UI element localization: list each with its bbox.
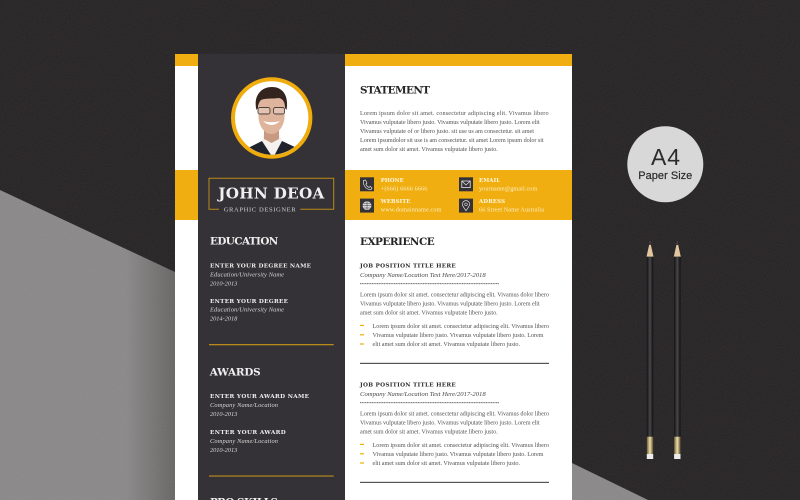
resume page — [175, 54, 572, 500]
job summary 2: Vivamus vulputate libero justo. Vivamus vulputate libero justo. Lorem elit — [360, 419, 540, 426]
job summary 1: Vivamus vulputate libero justo. Vivamus vulputate libero justo. Lorem elit — [360, 300, 540, 307]
page sheet — [175, 54, 572, 500]
award company 2: Company Name/Location — [210, 438, 278, 445]
education heading: EDUCATION — [210, 236, 279, 248]
yellow contact band left — [175, 170, 198, 220]
address details: 66 Street Name Australia — [479, 206, 544, 213]
phone details: +(666) 6666 6666 — [381, 185, 427, 192]
job bullets 2: Lorem ipsum dolor sit amet. consectetur adipiscing elit. Vivamus libero — [372, 442, 549, 449]
job bullets 1 — [360, 323, 549, 348]
company line 2: Company Name/Location Text Here/2017-2018 — [360, 391, 486, 398]
job bullets 1: Lorem ipsum dolor sit amet. consectetur adipiscing elit. Vivamus libero — [372, 323, 549, 330]
job summary 2 — [360, 410, 549, 435]
phone details: PHONE — [381, 178, 404, 184]
icon: pencil right — [674, 241, 681, 459]
email details: yourname@gmail.com — [479, 185, 537, 192]
yellow top band right — [345, 54, 572, 66]
statement section — [360, 84, 549, 153]
university 2: Education/University Name — [209, 307, 284, 314]
address details: ADRESS — [478, 199, 505, 205]
email details: EMAIL — [479, 178, 500, 184]
phone details — [381, 178, 427, 192]
company line 1: Company Name/Location Text Here/2017-2018 — [360, 272, 486, 279]
background: grey diagonal panel — [0, 190, 175, 500]
statement paragraph — [360, 110, 549, 153]
badge A4: A4 — [651, 144, 680, 170]
university 1: Education/University Name — [209, 271, 284, 278]
background: grey diagonal panel right of page — [572, 463, 648, 500]
address details — [478, 199, 544, 213]
statement paragraph: amet sum dolor sit amet. Vivamus vulputate libero justo. — [360, 146, 498, 153]
job entry 1 — [359, 264, 549, 348]
badge caption: Paper Size — [638, 170, 692, 182]
job bullets 2: Vivamus vulputate libero justo. Vivamus vulputate libero justo. Lorem — [372, 451, 544, 458]
experience section — [359, 236, 549, 483]
job title 2: JOB POSITION TITLE HERE — [359, 382, 456, 388]
job summary 2: Lorem ipsum dolor sit amet. consectetur adipiscing elit. Vivamus dolor libero — [360, 410, 549, 417]
awards heading: AWARDS — [209, 366, 261, 378]
education section — [209, 236, 312, 323]
profile photo — [233, 79, 310, 160]
degree 2: ENTER YOUR DEGREE — [210, 299, 289, 305]
job summary 2: amet sum dolor sit amet. Vivamus vulputate libero justo. — [360, 428, 498, 435]
name: JOHN DEOA — [216, 184, 325, 202]
portrait — [250, 87, 294, 155]
icon: location pin — [459, 199, 473, 213]
statement paragraph: Lorem ipsumdolor sit use is am consectetur. sit amet Lorem ipsum dolor sit — [360, 137, 544, 144]
award dates 1: 2010-2013 — [210, 411, 237, 418]
icon: mail — [459, 177, 473, 191]
job role: GRAPHIC DESIGNER — [224, 206, 296, 214]
job bullets 2: elit amet sum dolor sit amet. Vivamus vulputate libero justo. — [372, 460, 520, 467]
yellow contact band right — [345, 170, 572, 220]
statement paragraph: Lorem ipsum dolor sit amet. consectetur adipiscing elit. Vivamus libero — [360, 110, 549, 117]
icon: globe — [360, 199, 374, 213]
job summary 1: Lorem ipsum dolor sit amet. consectetur adipiscing elit. Vivamus dolor libero — [360, 291, 549, 298]
job summary 1: amet sum dolor sit amet. Vivamus vulputate libero justo. — [360, 309, 498, 316]
degree 1: ENTER YOUR DEGREE NAME — [210, 264, 312, 270]
award dates 2: 2010-2013 — [210, 447, 237, 454]
A4 paper size badge — [627, 126, 703, 202]
dates 1: 2010-2013 — [210, 280, 237, 287]
job bullets 1: elit amet sum dolor sit amet. Vivamus vulputate libero justo. — [372, 341, 520, 348]
photo ring — [233, 79, 310, 157]
statement paragraph: Vivamus vulputate of or libero justo. sit use us am consectetur. sit amet — [360, 128, 534, 135]
award 2: ENTER YOUR AWARD — [210, 430, 286, 436]
contact band — [360, 177, 544, 213]
job title 1: JOB POSITION TITLE HERE — [359, 264, 456, 270]
statement paragraph: Vivamus vulputate libero justo. Vivamus vulputate libero justo. Lorem elit — [360, 119, 540, 126]
yellow top band left — [175, 54, 198, 66]
dates 2: 2014-2018 — [210, 316, 238, 323]
name block — [209, 178, 334, 214]
job bullets 2 — [360, 442, 549, 467]
icon: phone — [360, 177, 374, 191]
dark sidebar — [198, 54, 345, 500]
awards section — [209, 366, 310, 454]
statement heading: STATEMENT — [360, 84, 430, 96]
website details: www.domainname.com — [381, 206, 442, 213]
award 1: ENTER YOUR AWARD NAME — [210, 394, 310, 400]
experience heading: EXPERIENCE — [360, 236, 435, 248]
job entry 2 — [359, 382, 549, 467]
job summary 1 — [360, 291, 549, 316]
job bullets 1: Vivamus vulputate libero justo. Vivamus vulputate libero justo. Lorem — [372, 332, 544, 339]
website details — [380, 199, 442, 213]
award company 1: Company Name/Location — [210, 402, 278, 409]
website details: WEBSITE — [380, 199, 410, 205]
name frame — [209, 178, 334, 209]
icon: pencil left — [646, 241, 654, 459]
email details — [479, 178, 537, 192]
